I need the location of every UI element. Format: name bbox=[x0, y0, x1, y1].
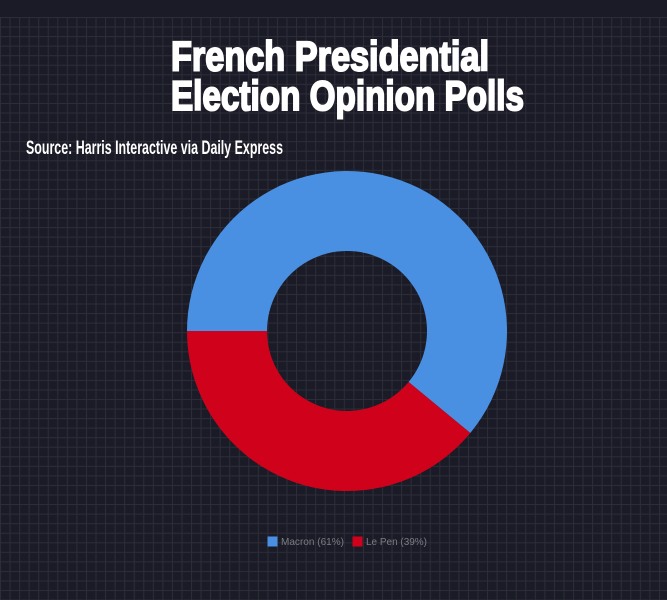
segment: Macron 61% bbox=[187, 171, 507, 433]
legend item: Le Pen: Le Pen (39%) bbox=[366, 536, 427, 548]
legend item: Macron: Macron (61%) bbox=[281, 536, 344, 548]
title: Election Opinion Polls bbox=[171, 72, 524, 119]
legend bbox=[268, 536, 427, 548]
donut chart bbox=[187, 171, 507, 491]
source line: Source: Harris Interactive via Daily Express bbox=[26, 137, 283, 159]
title: French Presidential bbox=[171, 32, 489, 80]
title bbox=[171, 32, 524, 119]
segment: Le Pen 39% bbox=[187, 331, 470, 491]
